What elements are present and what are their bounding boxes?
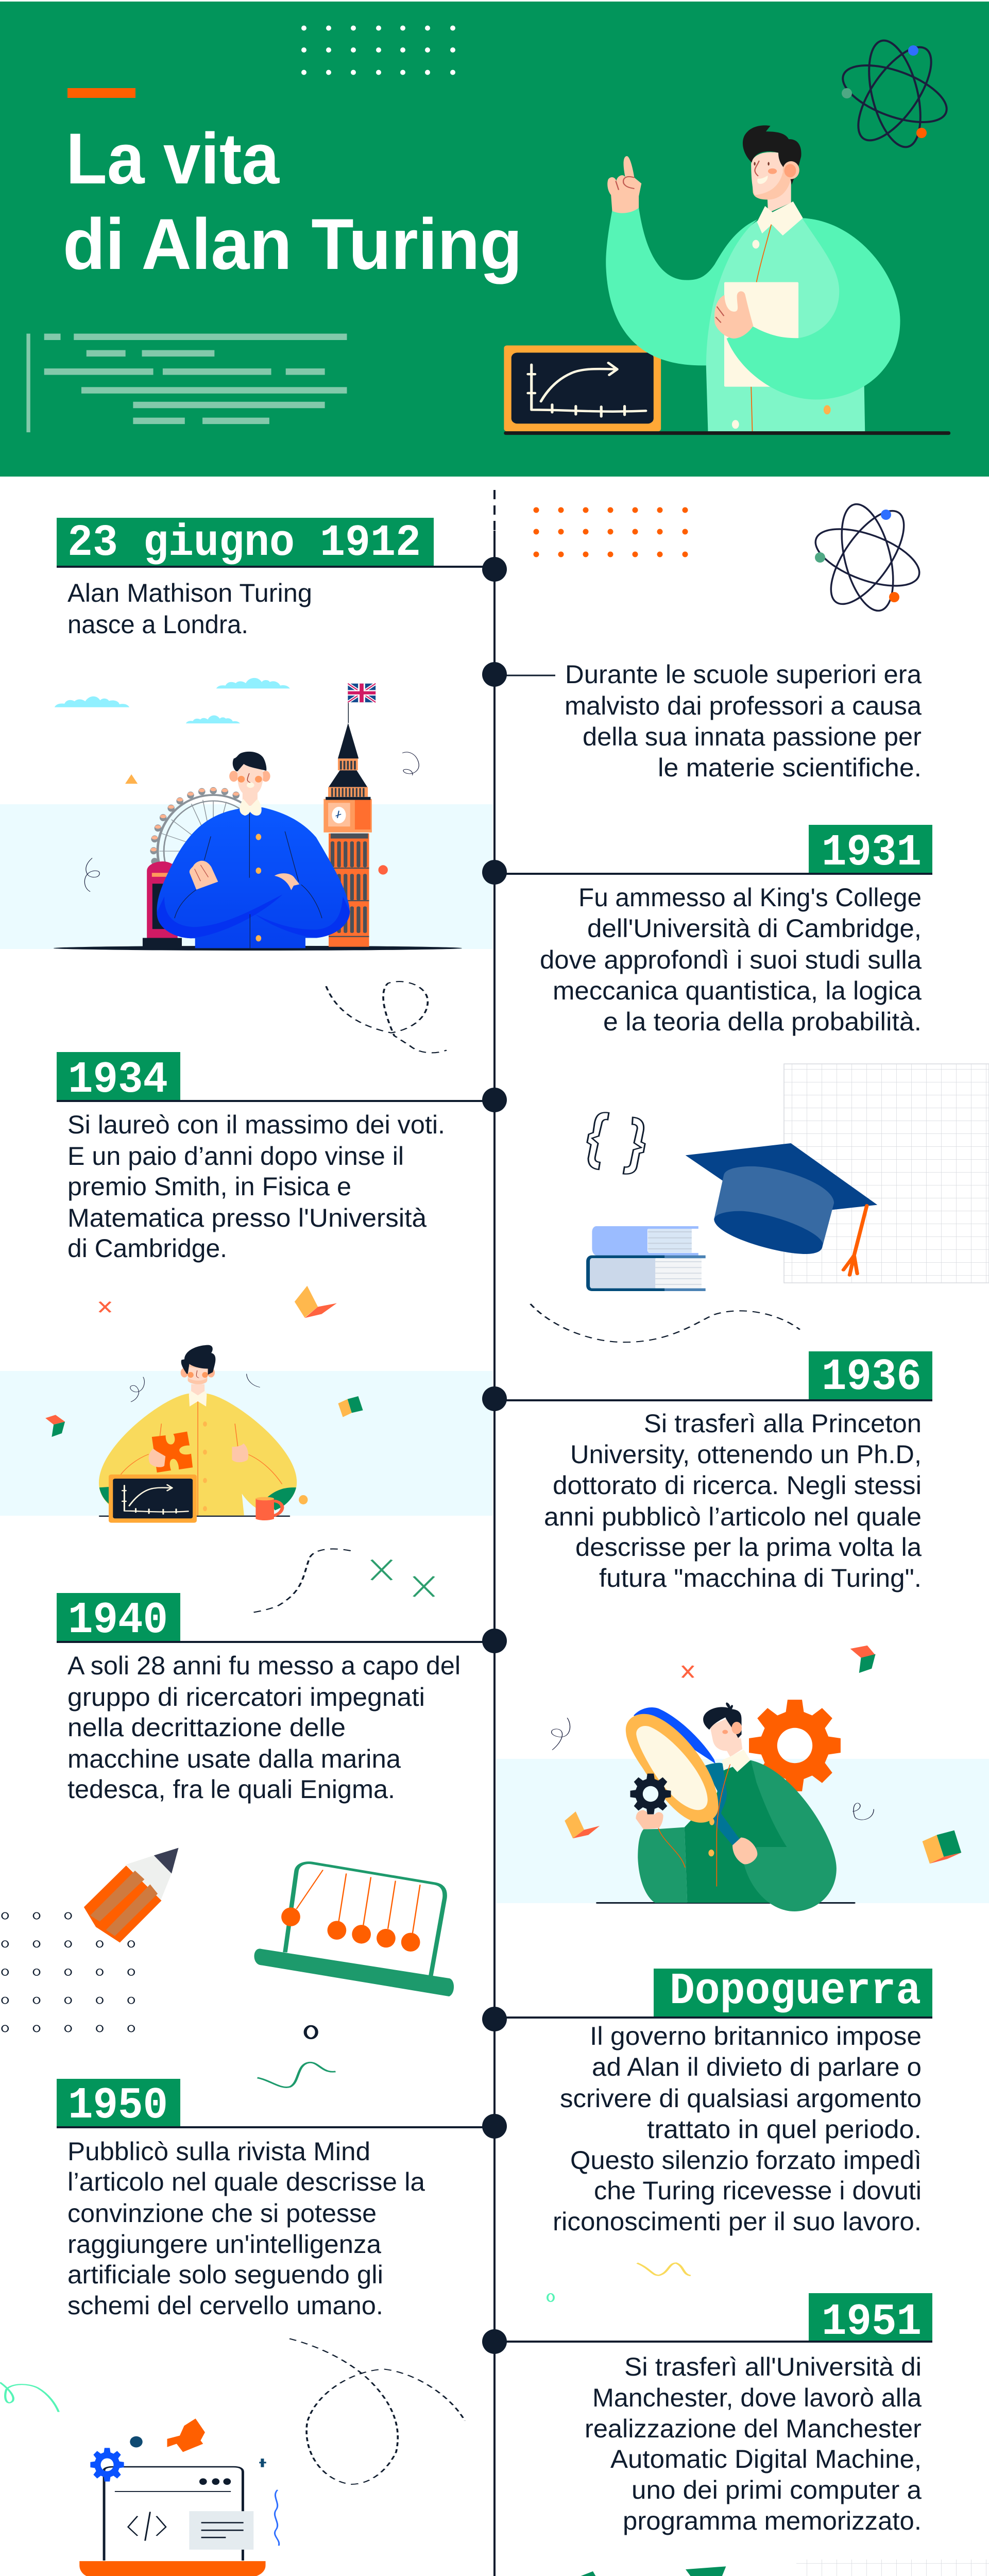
squiggles and shapes [84, 752, 419, 892]
text block: dottorato di ricerca. Negli stessi [553, 1471, 922, 1500]
date heading: 1950: 1950 [68, 2080, 168, 2131]
text block: Si laureò con il massimo dei voti. [67, 1110, 445, 1139]
date heading: 1951: 1951 [822, 2297, 922, 2347]
text block: University, ottenendo un Ph.D, [570, 1440, 922, 1469]
header panel [0, 2, 989, 477]
text block: della sua innata passione per [583, 722, 922, 751]
title [63, 118, 522, 284]
illustration: teacher with chalkboard [504, 125, 950, 435]
hands [636, 1810, 757, 1864]
squiggles [130, 1374, 260, 1402]
raised hand [607, 156, 641, 213]
text block [67, 1110, 445, 1263]
text block: dell'Università di Cambridge, [587, 914, 922, 943]
body [99, 1394, 297, 1516]
text block: nella decrittazione delle [67, 1713, 346, 1742]
text block: convinzione che si potesse [67, 2199, 377, 2228]
pale band behind gear scene [496, 1759, 989, 1903]
text block: riconoscimenti per il suo lavoro. [553, 2207, 922, 2236]
coat [706, 218, 865, 431]
text block: meccanica quantistica, la logica [553, 976, 922, 1005]
text block: E un paio d’anni dopo vinse il [67, 1142, 404, 1171]
section: 1931 [482, 825, 932, 1036]
Ferris wheel [150, 787, 269, 907]
text block: scrivere di qualsiasi argomento [560, 2084, 922, 2113]
mug [255, 1497, 282, 1520]
section: scuole superiori [482, 660, 922, 782]
text block: Si trasferì all'Università di [624, 2352, 922, 2381]
orange dot pattern [534, 507, 688, 557]
section: 1951 [482, 2293, 932, 2535]
buttons [732, 240, 831, 429]
dashed loop decoration [326, 981, 447, 1053]
text block: dove approfondì i suoi studi sulla [540, 945, 922, 974]
cubes [565, 1811, 961, 1863]
text block: ad Alan il divieto di parlare o [592, 2053, 922, 2081]
text block [67, 2137, 425, 2320]
code lines decoration [26, 334, 347, 432]
illustration: Turing with puzzle piece [99, 1345, 363, 1523]
squiggles [552, 1718, 874, 1820]
Big Ben [323, 684, 376, 947]
text block: uno dei primi computer a [632, 2476, 922, 2504]
text block [565, 660, 922, 782]
timeline node [482, 2007, 507, 2031]
phone box [143, 861, 182, 947]
graph paper grid [796, 2560, 989, 2576]
cuffs [99, 1487, 296, 1511]
graph paper grid [784, 1064, 989, 1283]
text block: futura "macchina di Turing". [599, 1564, 922, 1592]
orange accent bar [67, 88, 135, 98]
timeline node [482, 557, 507, 582]
head [229, 752, 270, 816]
date heading: 1951 [494, 2293, 932, 2347]
dashes and green x marks [252, 1549, 434, 1613]
date heading: Dopoguerra [494, 1966, 932, 2018]
dot grid [2, 1912, 134, 2032]
magnifier front [626, 1714, 719, 1823]
timeline axis [493, 490, 496, 2576]
text block: di Cambridge. [67, 1234, 227, 1263]
date heading: 23 giugno 1912: 23 giugno 1912 [67, 518, 421, 568]
timeline node [482, 1088, 507, 1112]
text block: Matematica presso l'Università [67, 1204, 427, 1232]
text block: descrisse per la prima volta la [575, 1533, 922, 1562]
section: Dopoguerra [482, 1966, 932, 2236]
icon: atom [808, 499, 927, 616]
illustration: Turing with magnifying glass [552, 1702, 961, 1911]
date heading: 1931 [494, 825, 932, 878]
floor [596, 1902, 856, 1904]
green arrow [515, 2566, 726, 2576]
section: 1936 [482, 1351, 932, 1592]
floor line [99, 1516, 290, 1517]
text block: A soli 28 anni fu messo a capo del [67, 1651, 461, 1680]
text block: Fu ammesso al King's College [578, 883, 922, 912]
Newton's cradle [254, 1863, 454, 1996]
head [181, 1345, 215, 1406]
text block: nasce a Londra. [67, 610, 248, 639]
date heading: 1934 [57, 1052, 494, 1105]
timeline node [482, 662, 507, 687]
text block: Manchester, dove lavorò alla [592, 2383, 922, 2412]
timeline node [482, 1629, 507, 1653]
small shapes [130, 2418, 279, 2576]
icon: atom [835, 36, 954, 152]
buttons [708, 1818, 714, 1856]
section: 1912 [57, 518, 507, 639]
date heading: 1931: 1931 [822, 827, 922, 878]
crossed arms shading [157, 894, 350, 938]
flag [348, 684, 376, 702]
section: 1934 [57, 1052, 507, 1263]
text block: realizzazione del Manchester [585, 2414, 922, 2443]
collar [757, 201, 803, 235]
cap [686, 1143, 877, 1275]
text block [540, 883, 922, 1036]
date heading: 1936: 1936 [822, 1352, 922, 1402]
yellow squiggle and mint ring [548, 2263, 691, 2301]
text block [67, 579, 312, 639]
text block [585, 2352, 922, 2535]
hand holding paper [714, 291, 753, 338]
text block: Si trasferì alla Princeton [644, 1409, 922, 1438]
date heading: Dopoguerra: Dopoguerra [670, 1966, 921, 2016]
hands [149, 1444, 248, 1467]
hair [743, 125, 802, 185]
timeline node [482, 860, 507, 885]
decorative x mark and open book [99, 1286, 337, 1318]
text block: Pubblicò sulla rivista Mind [67, 2137, 370, 2166]
clouds [55, 678, 290, 723]
dashed loop [289, 2338, 465, 2484]
puzzle piece [152, 1432, 193, 1472]
illustrations: pencil, Newton's cradle, dot grid [2, 1646, 876, 2087]
magnifier back [634, 1707, 715, 1764]
text block: trattato in quel periodo. [647, 2115, 922, 2144]
text block: artificiale solo seguendo gli [67, 2260, 383, 2289]
hands [190, 861, 299, 890]
buttons [255, 834, 261, 941]
raised arm [606, 208, 758, 365]
body [638, 1760, 837, 1911]
text block: macchine usate dalla marina [67, 1744, 401, 1773]
blue gear [90, 2448, 124, 2482]
paper [724, 282, 798, 387]
timeline node [482, 1386, 507, 1411]
title: La vita [66, 118, 280, 199]
illustration: Turing in London [54, 678, 462, 951]
illustration: code window and decorations [0, 2263, 726, 2576]
cube [338, 1396, 363, 1417]
text block: che Turing ricevesse i dovuti [594, 2176, 922, 2205]
neck [768, 180, 791, 213]
text block: schemi del cervello umano. [67, 2291, 383, 2320]
pale band behind London scene [0, 804, 493, 949]
date heading: 1934: 1934 [68, 1055, 168, 1105]
text block: gruppo di ricercatori impegnati [67, 1683, 425, 1711]
text block: Questo silenzio forzato impedì [570, 2146, 922, 2175]
text block: premio Smith, in Fisica e [67, 1172, 351, 1201]
text block: Alan Mathison Turing [67, 579, 312, 607]
text block: Durante le scuole superiori era [565, 660, 922, 689]
date heading: 1940 [57, 1593, 494, 1646]
dashed wave decoration [531, 1304, 800, 1342]
head [751, 152, 791, 199]
text block: e la teoria della probabilità. [603, 1007, 922, 1036]
text block: anni pubblicò l’articolo nel quale [544, 1502, 922, 1531]
text block [544, 1409, 922, 1592]
text block: raggiungere un'intelligenza [67, 2230, 381, 2259]
text block: Il governo britannico impose [590, 2022, 922, 2050]
braces [587, 1112, 645, 1174]
pale band behind puzzle scene [0, 1371, 493, 1516]
mint squiggle [0, 2382, 59, 2412]
folded arm [727, 218, 900, 399]
code window [79, 2467, 266, 2576]
timeline node [482, 2329, 507, 2354]
books [588, 1226, 706, 1291]
cube decoration left [45, 1415, 65, 1437]
section: 1940 [57, 1593, 507, 1804]
pencil [84, 1848, 179, 1942]
x mark and cube top right [683, 1646, 876, 1677]
date heading: 1936 [494, 1351, 932, 1402]
date heading: 1950 [57, 2079, 494, 2131]
text block: l’articolo nel quale descrisse la [67, 2167, 425, 2196]
floor [504, 431, 950, 435]
title: di Alan Turing [63, 204, 522, 284]
illustration: graduation cap and books [587, 1112, 877, 1291]
text block: Automatic Digital Machine, [610, 2445, 922, 2473]
date heading: 1940: 1940 [68, 1595, 168, 1646]
chalkboard [504, 346, 661, 431]
text block: le materie scientifiche. [658, 753, 922, 782]
text block: malvisto dai professori a causa [565, 691, 922, 720]
text block: programma memorizzato. [623, 2506, 922, 2535]
head [703, 1702, 751, 1772]
floor [54, 946, 462, 951]
chalkboard [109, 1475, 197, 1523]
text block [553, 2022, 922, 2236]
dot pattern: white [301, 26, 455, 75]
text block: tedesca, fra le quali Enigma. [67, 1775, 395, 1804]
small dark gear [630, 1773, 671, 1815]
section: 1950 [57, 2079, 507, 2320]
large orange gear [749, 1700, 841, 1791]
timeline node [482, 2114, 507, 2139]
ring and squiggle [258, 2026, 335, 2087]
character body [157, 807, 350, 948]
buttons [203, 1421, 207, 1511]
text block [67, 1651, 461, 1804]
